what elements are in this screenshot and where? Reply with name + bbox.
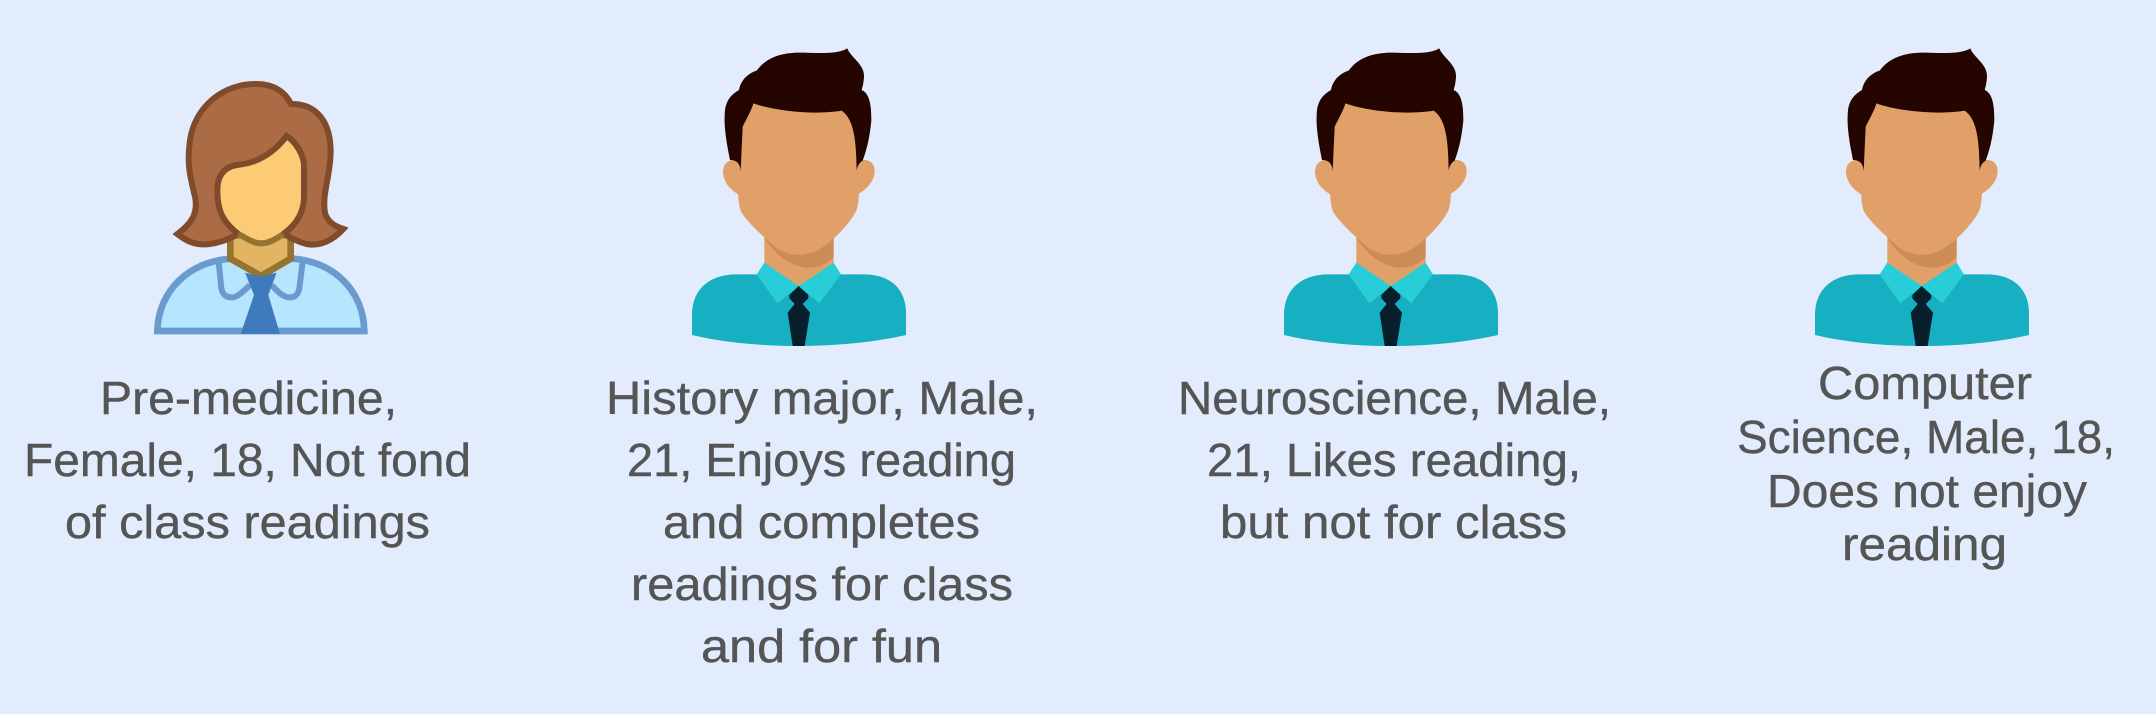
text: pre-medicine description: of class readings: [65, 496, 430, 548]
text: history major description: and completes: [663, 496, 980, 548]
text: history major description: History major, Male,: [606, 372, 1038, 424]
text: computer science description: Computer: [1818, 357, 2032, 409]
text: computer science description: Does not enjoy: [1767, 465, 2087, 517]
text: computer science description: Science, Male, 18,: [1737, 411, 2115, 463]
text: computer science description: reading: [1842, 518, 2007, 570]
text: history major description: and for fun: [701, 620, 942, 672]
text: neuroscience description: Neuroscience, Male,: [1178, 372, 1611, 424]
panel: neuroscience student: [1178, 48, 1611, 548]
panel: pre-medicine student: [24, 84, 471, 548]
text: history major description: readings for class: [631, 558, 1013, 610]
text: neuroscience description: [1178, 372, 1611, 548]
icon: man avatar: [1815, 48, 2029, 346]
panel: history major: [606, 48, 1038, 672]
text: history major description: [606, 372, 1038, 672]
text: neuroscience description: 21, Likes reading,: [1207, 434, 1581, 486]
text: pre-medicine description: Female, 18, Not fond: [24, 434, 471, 486]
icon: man avatar: [692, 48, 906, 346]
text: pre-medicine description: [24, 372, 471, 548]
panel: computer science student: [1737, 48, 2115, 570]
text: history major description: 21, Enjoys reading: [627, 434, 1016, 486]
text: neuroscience description: but not for class: [1220, 496, 1567, 548]
icon: man avatar: [1284, 48, 1498, 346]
icon: woman avatar: [157, 84, 364, 334]
text: pre-medicine description: Pre-medicine,: [100, 372, 397, 424]
text: computer science description: [1737, 357, 2115, 570]
